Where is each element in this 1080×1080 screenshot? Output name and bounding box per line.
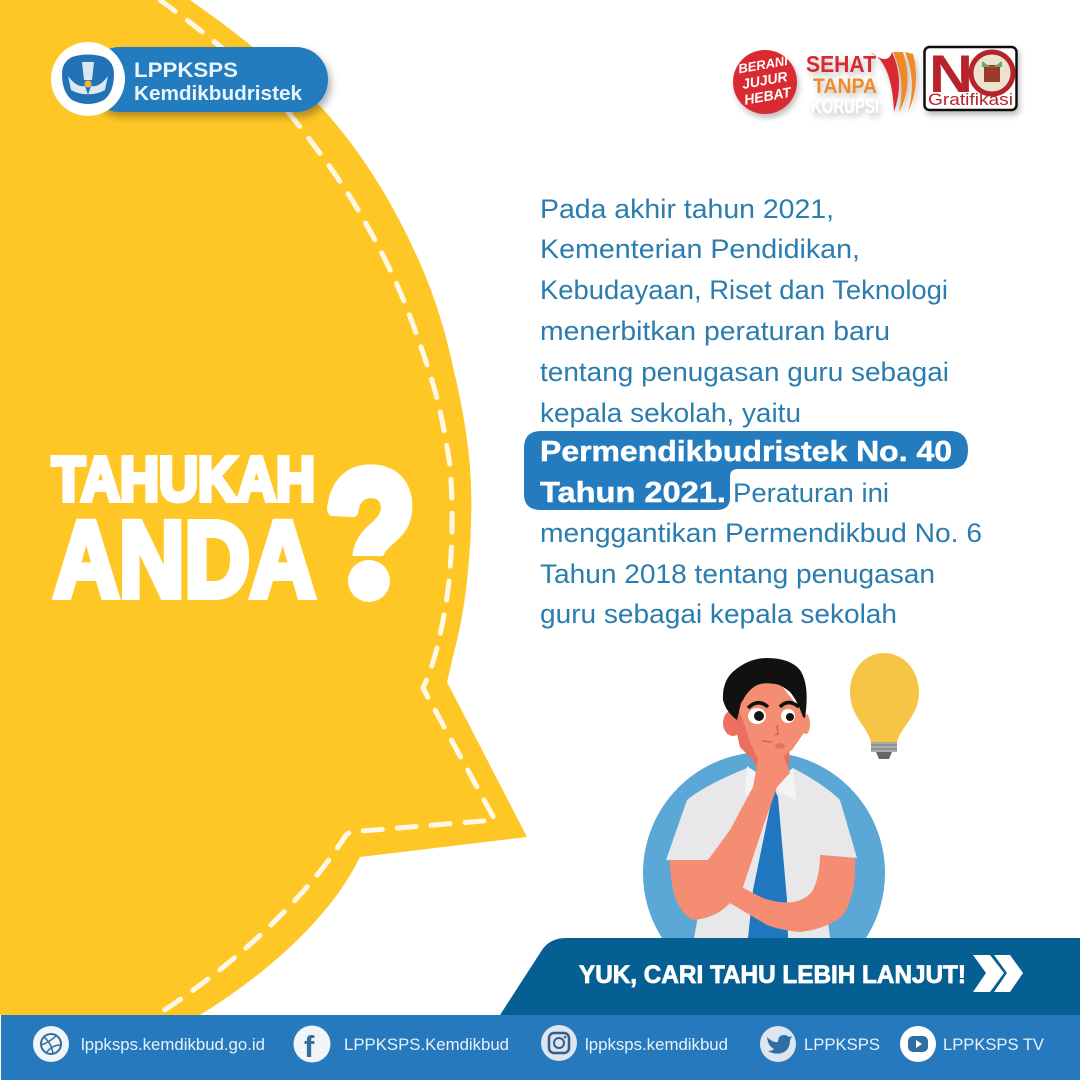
nose and mouth — [762, 725, 778, 742]
hair — [723, 658, 807, 720]
eyes — [748, 708, 766, 724]
ear — [723, 710, 743, 736]
website link — [33, 1026, 265, 1062]
body text: guru sebagai kepala sekolah — [540, 599, 897, 629]
logo badge: LPPKSPS Kemdikbudristek: LPPKSPS — [134, 58, 238, 82]
question mark: ? — [326, 435, 415, 636]
body text: kepala sekolah, yaitu — [540, 398, 801, 428]
logo: Berani Jujur Hebat: JUJUR — [741, 68, 790, 92]
twitter link — [760, 1026, 880, 1062]
body text: Kebudayaan, Riset dan Teknologi — [540, 275, 948, 305]
icon: ministry emblem — [62, 54, 114, 104]
logo badge: LPPKSPS Kemdikbudristek — [51, 42, 328, 116]
youtube link: LPPKSPS TV — [943, 1035, 1045, 1054]
highlight: regulation name: Tahun 2021. — [540, 477, 726, 509]
logo: Sehat Tanpa Korupsi: KORUPSI — [811, 96, 879, 118]
body text — [524, 194, 982, 629]
logo: Berani Jujur Hebat: BERANI — [737, 53, 789, 76]
logo: Sehat Tanpa Korupsi: TANPA — [813, 75, 877, 98]
logo: Berani Jujur Hebat — [733, 50, 797, 114]
body text: Peraturan ini — [733, 478, 889, 508]
website link: lppksps.kemdikbud.go.id — [81, 1035, 265, 1054]
body text: menggantikan Permendikbud No. 6 — [540, 518, 982, 548]
facebook link: LPPKSPS.Kemdikbud — [344, 1035, 509, 1054]
body text: Tahun 2018 tentang penugasan — [540, 559, 935, 589]
youtube link — [900, 1026, 1045, 1062]
tie — [748, 788, 788, 938]
collar — [745, 766, 796, 805]
call to action banner — [500, 938, 1080, 1015]
logo: No Gratifikasi: N — [929, 45, 973, 104]
logo: Berani Jujur Hebat: HEBAT — [743, 84, 793, 108]
instagram link: lppksps.kemdikbud — [585, 1035, 728, 1054]
highlight: regulation name: Permendikbudristek No. 40 — [540, 436, 952, 468]
heading: Tahukah Anda: TAHUKAH — [52, 446, 315, 514]
logo: Sehat Tanpa Korupsi: SEHAT — [806, 51, 876, 77]
instagram link — [541, 1025, 728, 1061]
body text: Pada akhir tahun 2021, — [540, 194, 834, 224]
call to action banner: YUK, CARI TAHU LEBIH LANJUT! — [579, 961, 966, 989]
right arm — [730, 855, 855, 932]
heading: Tahukah Anda: ANDA — [54, 498, 316, 620]
icon: light bulb — [850, 653, 919, 759]
yellow speech bubble — [0, 0, 527, 1015]
logo: Sehat Tanpa Korupsi — [806, 51, 916, 118]
facebook link: f — [304, 1029, 315, 1064]
neck — [748, 745, 790, 778]
eyebrows — [748, 702, 799, 708]
left arm and hand — [670, 748, 790, 920]
logos: campaign badges — [733, 45, 1016, 118]
logo badge: LPPKSPS Kemdikbudristek: Kemdikbudristek — [134, 82, 303, 105]
footer bar — [1, 1015, 1080, 1080]
facebook link — [294, 1026, 509, 1064]
logo: No Gratifikasi — [924, 45, 1016, 110]
highlight: regulation name — [524, 431, 968, 510]
dashed bubble outline — [157, 0, 495, 1015]
blue circle backdrop — [643, 752, 885, 994]
twitter link: LPPKSPS — [804, 1035, 880, 1054]
illustration: thinking man — [643, 658, 885, 994]
icon: double chevron — [973, 955, 1023, 992]
shirt — [666, 768, 857, 938]
heading: Tahukah Anda — [52, 435, 415, 636]
logo: No Gratifikasi: Gratifikasi — [928, 90, 1013, 109]
face shadow — [735, 705, 763, 770]
face — [737, 680, 806, 770]
body text: menerbitkan peraturan baru — [540, 316, 890, 346]
body text: tentang penugasan guru sebagai — [540, 357, 949, 387]
body text: Kementerian Pendidikan, — [540, 234, 860, 264]
